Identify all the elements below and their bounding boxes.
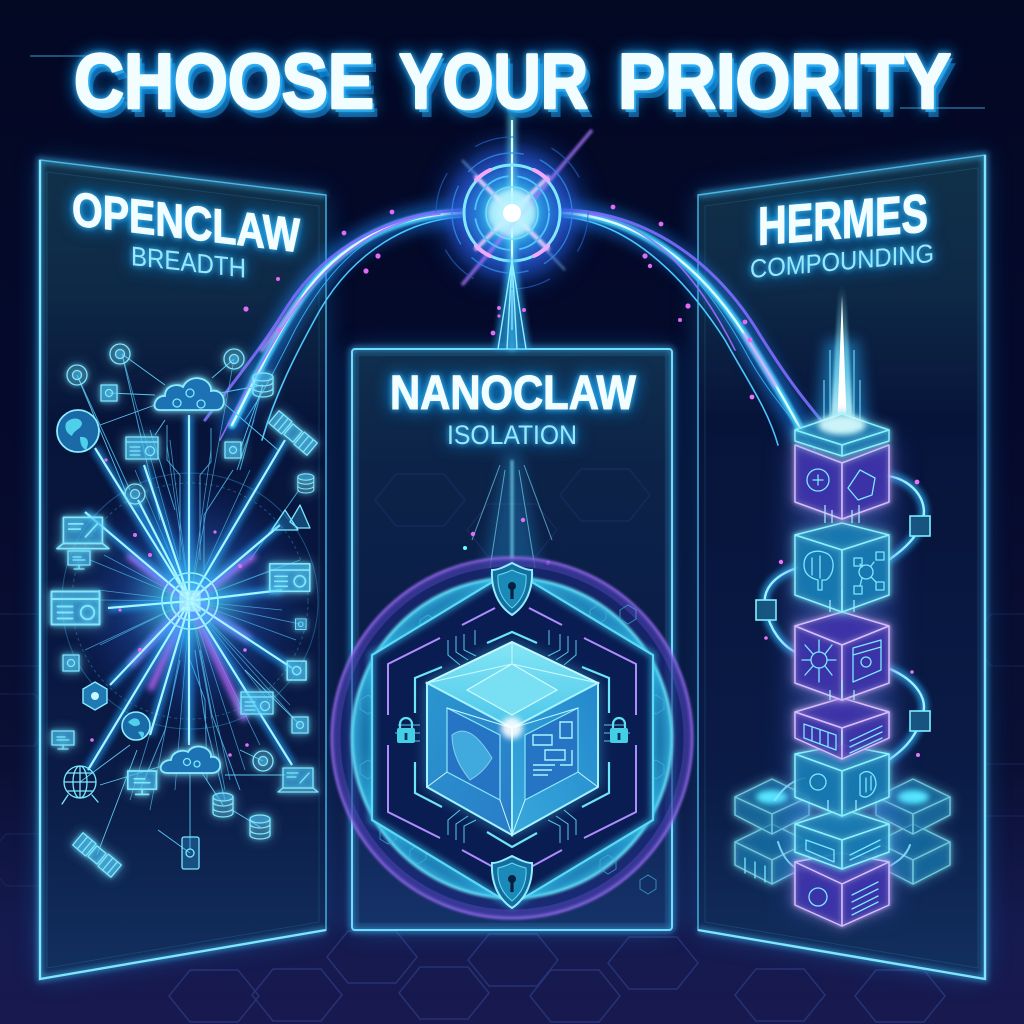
subheading: Isolation: ISOLATION [447, 420, 577, 450]
title: PRIORITY [624, 46, 957, 134]
thin connector lines [77, 354, 300, 855]
heading: OpenClaw: OPENCLAW [72, 182, 300, 263]
title: YOUR [399, 37, 588, 125]
block 2 [795, 523, 889, 612]
title: YOUR [402, 41, 591, 129]
top flare [818, 415, 866, 435]
block 1 [795, 445, 889, 519]
purple spokes [128, 555, 255, 720]
hexagon shell [372, 570, 653, 905]
stacked glow [790, 440, 894, 910]
icon: large globe [57, 410, 99, 452]
arcs: energy streams from the orb [205, 205, 825, 450]
central orb [436, 110, 592, 350]
orbit arcs [62, 473, 318, 729]
inner cyan sphere [352, 578, 672, 898]
panel: Hermes frame [698, 155, 985, 979]
NanoClaw isolation sphere [332, 452, 692, 918]
icon: bottom shield [492, 856, 532, 908]
block 6 [795, 809, 889, 869]
icon: phone [182, 837, 199, 869]
Hermes compounding tower [735, 285, 950, 926]
pink sparks [90, 458, 249, 757]
title: CHOOSE [74, 37, 374, 125]
icon: top cloud [155, 378, 224, 410]
spoke glow [85, 415, 292, 770]
title [30, 37, 985, 134]
thin spokes [85, 354, 300, 810]
title: CHOOSE [80, 46, 380, 134]
side stack: left [735, 779, 809, 884]
icon: small globe [122, 712, 150, 740]
icon: hex node [83, 682, 107, 710]
hub glow [65, 476, 315, 726]
OpenClaw network diagram [52, 344, 318, 877]
small link squares [756, 516, 930, 731]
panel: OpenClaw frame [40, 160, 326, 979]
glass cube [427, 642, 598, 835]
block icons [745, 469, 884, 915]
pink sparks [750, 395, 920, 757]
panel: NanoClaw frame [352, 349, 672, 930]
purple hex segments [388, 608, 636, 868]
heading: NanoClaw: NANOCLAW [390, 367, 637, 420]
block 7 [795, 853, 889, 926]
side stack: right [876, 779, 950, 884]
heading: Hermes: HERMES [758, 183, 928, 257]
connecting orbit arcs [765, 476, 924, 872]
circuit traces [395, 630, 630, 843]
title: CHOOSE [77, 41, 377, 129]
top plate [795, 414, 889, 456]
subheading: Compounding: COMPOUNDING [750, 238, 934, 284]
outer purple sphere [332, 558, 692, 918]
icon: right lock [610, 718, 628, 743]
falling beam [463, 452, 552, 570]
light shafts [825, 505, 859, 810]
hub core [162, 573, 218, 629]
icon: bottom cloud [161, 747, 220, 773]
icon: wire globe [62, 766, 98, 804]
cyan hex segments [415, 632, 609, 847]
icon set: data nodes [52, 344, 318, 877]
side glows [756, 790, 929, 804]
circuit traces [77, 354, 299, 800]
block 5 [795, 745, 889, 816]
light beam [815, 285, 869, 432]
title: YOUR [405, 46, 594, 134]
sphere hex lattice [360, 605, 664, 894]
icon: top shield [492, 563, 532, 615]
icon: left lock [397, 718, 415, 743]
block 3 [795, 612, 889, 700]
title: PRIORITY [618, 37, 951, 125]
title: PRIORITY [621, 41, 954, 129]
block 4 [795, 698, 889, 759]
subheading: Breadth: BREADTH [131, 240, 246, 284]
icon: mountain node [272, 505, 310, 530]
bright spokes [85, 415, 292, 770]
